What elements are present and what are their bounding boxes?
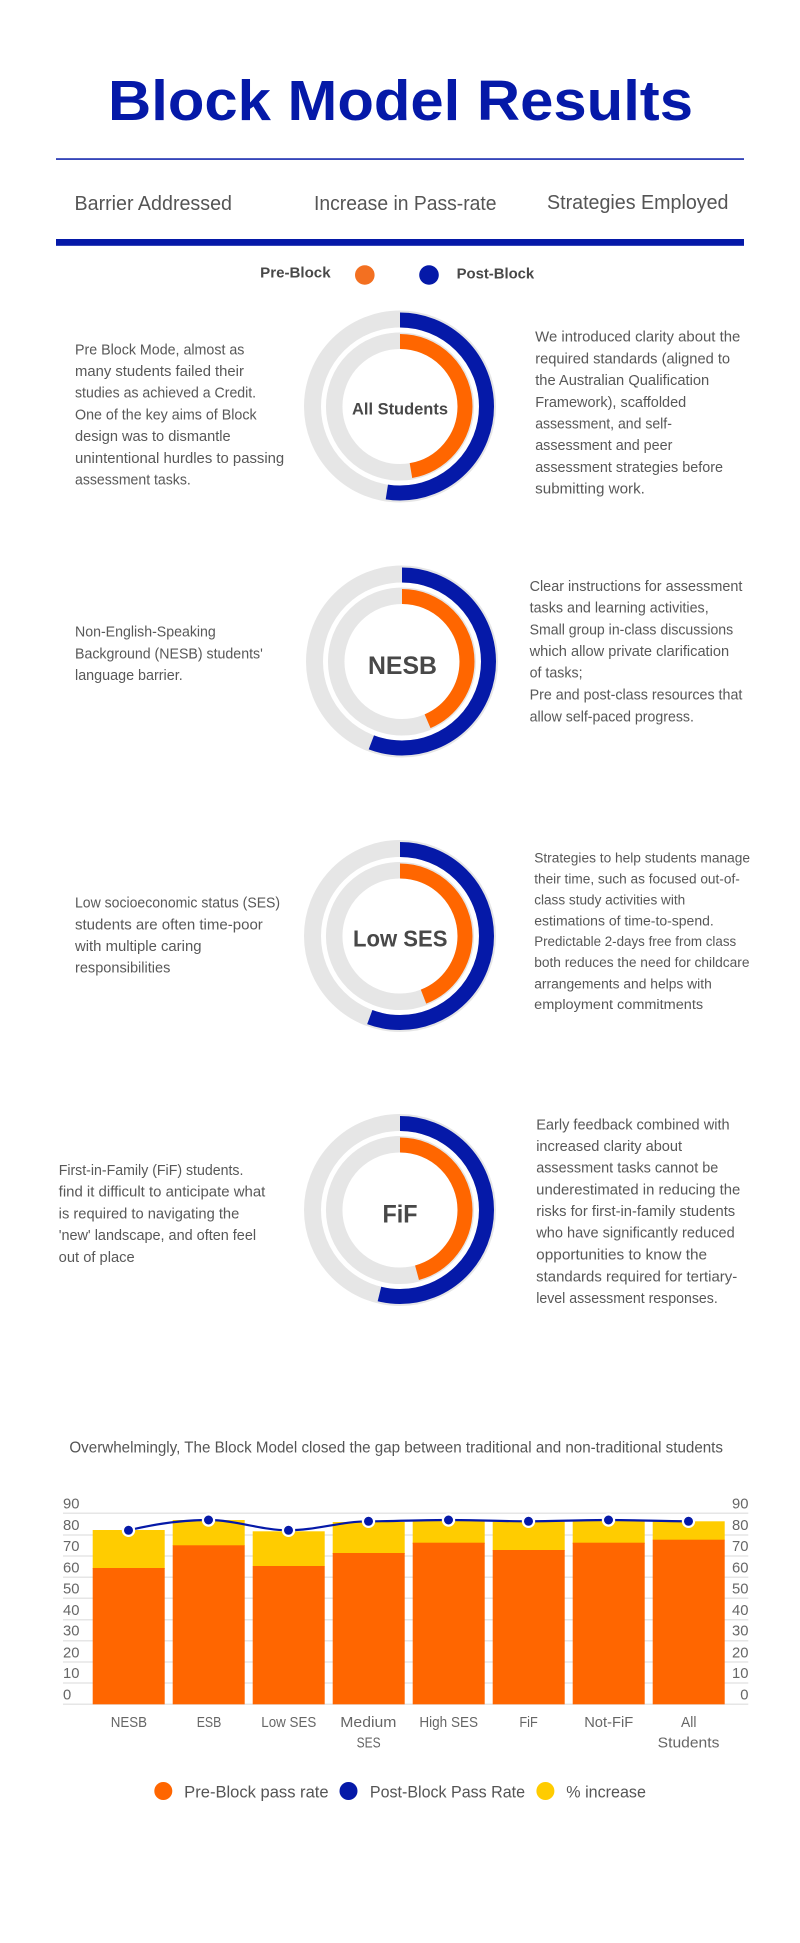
strategy text: low SES: their time, such as focused out-of- [534, 871, 740, 887]
barrier text: all students [75, 342, 284, 488]
strategy text: all students: required standards (aligned to [535, 351, 730, 367]
strategy text: FiF: Early feedback combined with [536, 1117, 730, 1133]
barrier text: all students: design was to dismantle [75, 429, 231, 445]
strategy text: low SES: estimations of time-to-spend. [534, 913, 714, 929]
barrier text: NESB: language barrier. [75, 668, 183, 684]
strategy text: FiF: who have significantly reduced [535, 1226, 735, 1242]
barrier text: FiF: find it difficult to anticipate what [59, 1185, 265, 1201]
donut: FiF [312, 1122, 488, 1298]
strategy text: NESB: Pre and post-class resources that [530, 688, 742, 704]
chart legend [154, 1782, 646, 1802]
barrier text: all students: many students failed their [75, 364, 244, 380]
right y axis labels: 10 [732, 1666, 748, 1682]
strategy text: NESB [529, 579, 742, 725]
barrier text: low SES [74, 896, 280, 977]
ring legend [260, 264, 535, 285]
chart legend: % increase [566, 1784, 646, 1802]
chart legend: Post-Block Pass Rate [370, 1784, 525, 1802]
left y axis labels: 10 [63, 1666, 79, 1682]
strategy text: NESB: Clear instructions for assessment [530, 579, 742, 595]
strategy text: all students: submitting work. [535, 482, 645, 498]
donut: NESB: NESB [368, 652, 437, 680]
strategy text: low SES [534, 851, 750, 1013]
barrier text: all students: Pre Block Mode, almost as [75, 342, 244, 358]
strategy text: low SES: Predictable 2-days free from class [534, 934, 736, 950]
panel: all students [75, 319, 740, 498]
barrier text: all students: One of the key aims of Block [75, 407, 257, 423]
barrier text: all students: unintentional hurdles to passing [75, 451, 284, 467]
barrier text: all students: studies as achieved a Credit. [75, 386, 256, 402]
left y axis labels: 30 [63, 1624, 79, 1640]
left y axis labels: 70 [63, 1539, 79, 1555]
strategy text: all students: We introduced clarity about the [535, 330, 740, 346]
panel: low SES [74, 848, 750, 1024]
right y axis labels: 40 [732, 1603, 748, 1619]
strategy text: NESB: allow self-paced progress. [530, 709, 694, 725]
left y axis labels [63, 1496, 79, 1704]
strategy text: low SES: both reduces the need for childcare [534, 955, 750, 971]
combo chart: pass rates by student group [63, 1496, 748, 1751]
left y axis labels: 0 [63, 1688, 71, 1704]
donut: all students [312, 319, 488, 494]
strategy text: all students: the Australian Qualification [535, 373, 709, 389]
strategy text: FiF: opportunities to know the [536, 1247, 707, 1263]
title: Block Model Results [108, 69, 693, 133]
x axis category labels: SES [357, 1734, 381, 1751]
left y axis labels: 90 [63, 1496, 79, 1512]
right y axis labels: 20 [732, 1645, 748, 1661]
stacked bars: pre-block pass rate [93, 1540, 725, 1704]
right y axis labels: 50 [732, 1581, 748, 1597]
right y axis labels: 80 [732, 1518, 748, 1534]
strategy text: NESB: Small group in-class discussions [530, 622, 733, 638]
barrier text: low SES: responsibilities [75, 961, 170, 977]
strategy text: NESB: tasks and learning activities, [530, 601, 709, 617]
x axis category labels: FiF [519, 1714, 538, 1731]
donut: low SES: Low SES [353, 926, 448, 952]
right y axis labels: 60 [732, 1560, 748, 1576]
strategy text: low SES: class study activities with [534, 892, 685, 908]
right y axis labels [732, 1496, 748, 1704]
barrier text: low SES: Low socioeconomic status (SES) [75, 896, 280, 912]
strategy text: all students: assessment and peer [535, 438, 672, 454]
strategy text: all students: assessment strategies before [535, 460, 723, 476]
barrier text: NESB: Background (NESB) students' [75, 646, 263, 662]
right y axis labels: 70 [732, 1539, 748, 1555]
barrier text: FiF [59, 1163, 265, 1266]
strategy text: NESB: of tasks; [530, 666, 583, 682]
strategy text: FiF: underestimated in reducing the [536, 1182, 740, 1198]
x axis category labels: Not-FiF [584, 1714, 633, 1731]
barrier text: low SES: students are often time-poor [75, 917, 263, 933]
strategy text: NESB: which allow private clarification [529, 644, 729, 660]
strategy text: all students [535, 330, 740, 498]
strategy text: FiF: increased clarity about [536, 1139, 682, 1155]
column heading: barrier addressed: Barrier Addressed [74, 193, 232, 215]
donut: low SES [312, 848, 488, 1024]
strategy text: low SES: employment commitments [534, 997, 703, 1013]
left y axis labels: 40 [63, 1603, 79, 1619]
left y axis labels: 80 [63, 1518, 79, 1534]
left y axis labels: 50 [63, 1581, 79, 1597]
right y axis labels: 90 [732, 1496, 748, 1512]
strategy text: all students: Framework), scaffolded [535, 395, 686, 411]
chart legend: Pre-Block pass rate [184, 1784, 329, 1802]
barrier text: FiF: is required to navigating the [59, 1206, 239, 1222]
barrier text: FiF: 'new' landscape, and often feel [59, 1228, 256, 1244]
x axis category labels: High SES [419, 1714, 478, 1731]
barrier text: all students: assessment tasks. [75, 472, 191, 488]
column heading: strategies employed: Strategies Employed [547, 192, 728, 214]
strategy text: low SES: arrangements and helps with [534, 976, 712, 992]
strategy text: all students: assessment, and self- [535, 416, 672, 432]
strategy text: FiF: level assessment responses. [536, 1291, 718, 1307]
left y axis labels: 20 [63, 1645, 79, 1661]
x axis category labels: Low SES [261, 1714, 316, 1731]
barrier text: low SES: with multiple caring [74, 939, 202, 955]
barrier text: NESB: Non-English-Speaking [75, 625, 216, 641]
donut: NESB [314, 574, 490, 749]
strategy text: FiF [535, 1117, 740, 1307]
x axis category labels: Students [658, 1734, 719, 1751]
column header band [56, 158, 744, 246]
column heading: increase in pass-rate: Increase in Pass-rate [314, 193, 496, 215]
strategy text: low SES: Strategies to help students manage [534, 851, 750, 867]
right y axis labels: 30 [732, 1624, 748, 1640]
panel: NESB [75, 574, 742, 749]
strategy text: FiF: assessment tasks cannot be [536, 1161, 718, 1177]
panel: FiF [59, 1117, 740, 1307]
x axis category labels [111, 1714, 719, 1751]
strategy text: FiF: risks for first-in-family students [536, 1204, 735, 1220]
barrier text: NESB [75, 625, 263, 684]
ring legend: Post-Block [457, 266, 535, 282]
ring legend: Pre-Block [260, 264, 331, 282]
right y axis labels: 0 [740, 1688, 748, 1704]
stacked bars: % increase [93, 1520, 725, 1569]
x axis category labels: Medium [340, 1714, 396, 1731]
x axis category labels: ESB [197, 1714, 221, 1731]
barrier text: FiF: First-in-Family (FiF) students. [59, 1163, 243, 1179]
donut: FiF: FiF [382, 1201, 418, 1229]
strategy text: FiF: standards required for tertiary- [536, 1269, 737, 1285]
line series: post-block pass rate [123, 1514, 694, 1536]
x axis category labels: NESB [111, 1714, 147, 1731]
left y axis labels: 60 [63, 1560, 79, 1576]
barrier text: FiF: out of place [59, 1250, 135, 1266]
chart title: Overwhelmingly, The Block Model closed the gap between traditional and non-traditional students [69, 1440, 723, 1457]
x axis category labels: All [681, 1714, 696, 1731]
donut: all students: All Students [352, 400, 448, 418]
